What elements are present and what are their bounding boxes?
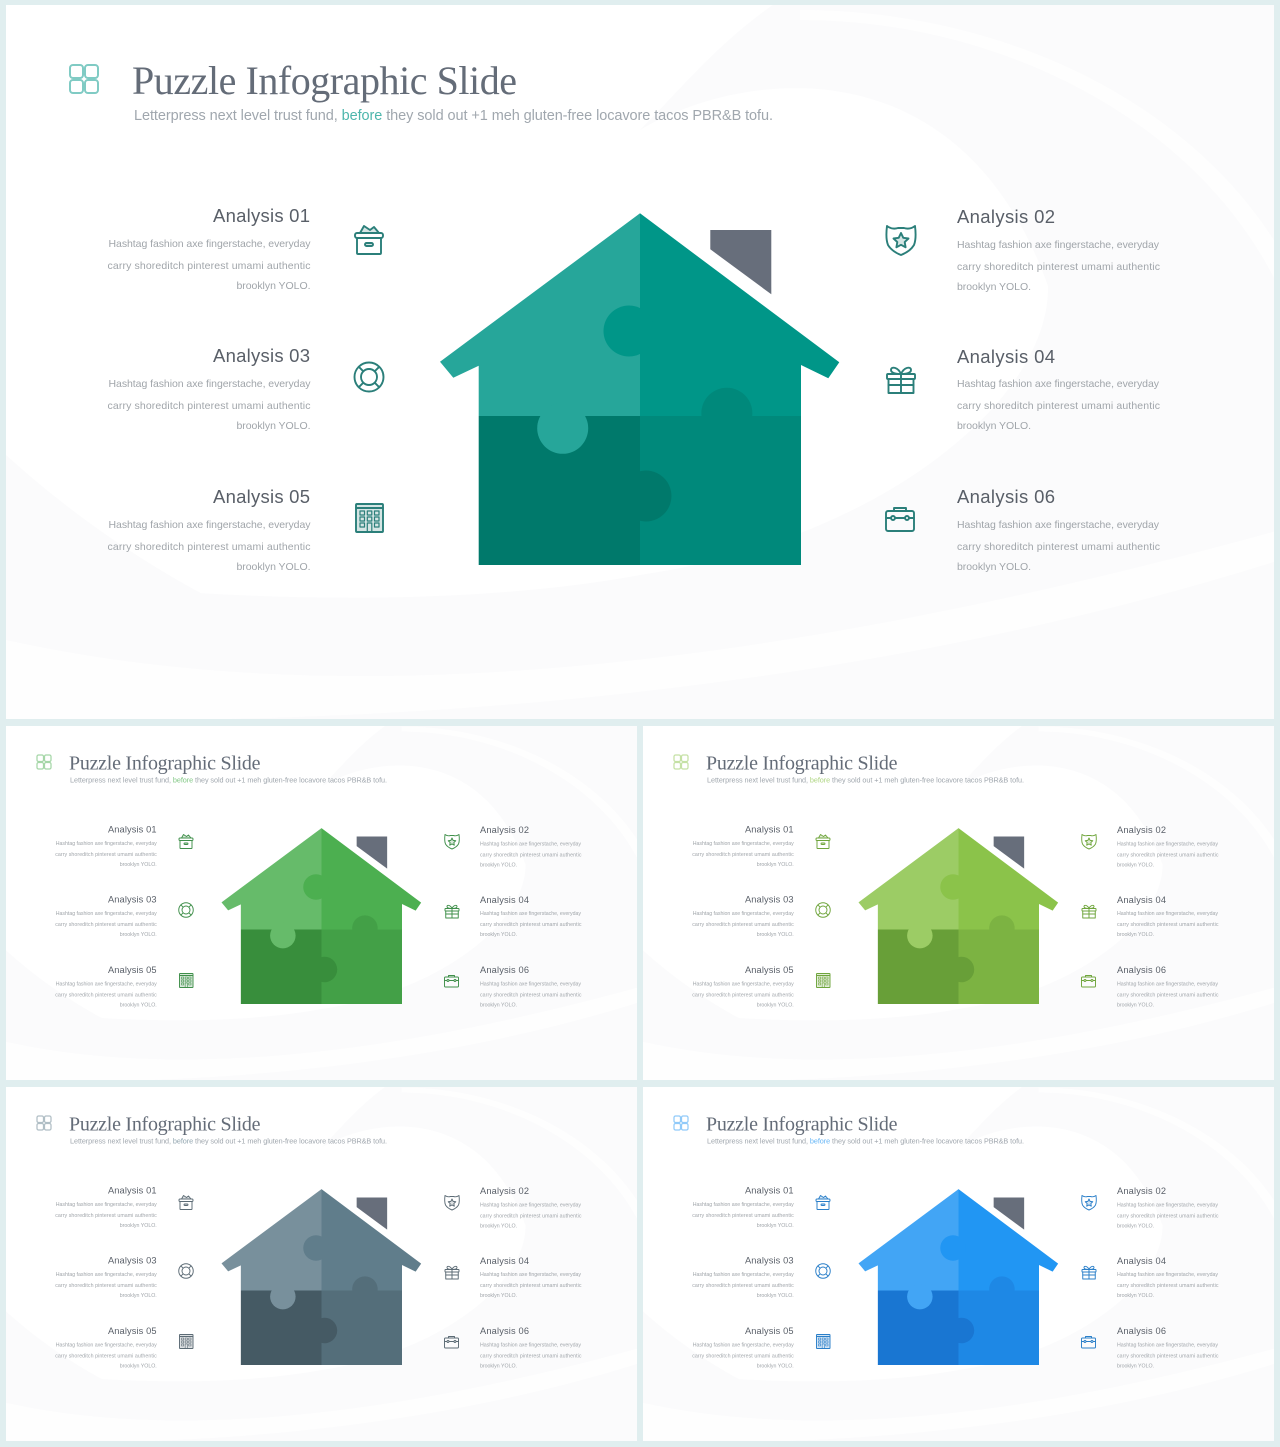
text: Analysis 01: Hashtag fashion axe fingerstache, everyday xyxy=(56,841,157,847)
text: Analysis 06: carry shoreditch pinterest umami authentic xyxy=(480,992,582,998)
text: Analysis 06: Analysis 06 xyxy=(480,965,529,975)
text: Analysis 05: carry shoreditch pinterest umami authentic xyxy=(55,992,157,998)
text: Analysis 04: brooklyn YOLO. xyxy=(957,420,1031,432)
panel: blue slide xyxy=(642,1082,1278,1443)
icon: building xyxy=(180,974,193,988)
text: Analysis 04: carry shoreditch pinterest umami authentic xyxy=(480,922,582,928)
text: Analysis 03 xyxy=(55,1256,157,1299)
text: Analysis 06: Hashtag fashion axe fingerstache, everyday xyxy=(1117,1342,1218,1348)
text: Analysis 03: carry shoreditch pinterest umami authentic xyxy=(108,400,310,412)
icon: briefcase xyxy=(886,508,914,531)
icon: four squares xyxy=(674,755,688,769)
puzzle house: light green xyxy=(858,828,1058,1004)
text: Analysis 06: brooklyn YOLO. xyxy=(1117,1002,1154,1008)
text: Analysis 01: Hashtag fashion axe fingerstache, everyday xyxy=(108,238,311,250)
text: Analysis 03: Analysis 03 xyxy=(745,894,794,904)
text: Analysis 04: brooklyn YOLO. xyxy=(1117,1293,1154,1299)
text: Analysis 05 xyxy=(108,486,311,573)
text: Analysis 03: carry shoreditch pinterest umami authentic xyxy=(55,922,157,928)
puzzle house: blue xyxy=(858,1189,1058,1365)
text: Analysis 02 xyxy=(1117,1186,1219,1230)
icon: gift xyxy=(445,1266,459,1279)
text: Analysis 03 xyxy=(108,345,311,432)
text: Analysis 04 xyxy=(480,1256,582,1299)
text: Analysis 04: Analysis 04 xyxy=(1117,895,1166,905)
icon: shield star xyxy=(1082,834,1096,849)
text: Analysis 04 xyxy=(957,346,1160,432)
icon: building xyxy=(356,504,383,532)
icon: box xyxy=(355,226,383,254)
text: Analysis 01: Hashtag fashion axe fingerstache, everyday xyxy=(693,1202,794,1208)
text: Analysis 05: brooklyn YOLO. xyxy=(757,1364,794,1370)
icon: briefcase xyxy=(444,976,458,987)
text: Analysis 06: Hashtag fashion axe fingerstache, everyday xyxy=(957,519,1160,531)
text: Analysis 02: carry shoreditch pinterest umami authentic xyxy=(1117,1214,1219,1220)
icon: gift xyxy=(445,905,459,918)
text: Analysis 04: brooklyn YOLO. xyxy=(480,1293,517,1299)
text: Analysis 03: brooklyn YOLO. xyxy=(120,1293,157,1299)
icon: building xyxy=(816,974,830,988)
header: blue slide xyxy=(674,1114,1024,1146)
icon: gift xyxy=(1082,1266,1096,1279)
text: Analysis 06: brooklyn YOLO. xyxy=(480,1364,517,1370)
text: Analysis 05: Analysis 05 xyxy=(745,1326,794,1336)
text: Analysis 03 xyxy=(692,1256,794,1299)
text: Analysis 04: carry shoreditch pinterest umami authentic xyxy=(957,400,1160,412)
text: Analysis 06: Hashtag fashion axe fingerstache, everyday xyxy=(480,1342,581,1348)
text: Analysis 05 xyxy=(55,1326,157,1370)
title: Puzzle Infographic Slide xyxy=(69,752,261,774)
text: Analysis 01: Hashtag fashion axe fingerstache, everyday xyxy=(693,841,794,847)
header: blue grey slide xyxy=(37,1114,387,1146)
icon: lifebuoy xyxy=(816,1264,830,1278)
text: Analysis 04: Hashtag fashion axe fingerstache, everyday xyxy=(480,911,581,917)
text: Analysis 06: Analysis 06 xyxy=(957,486,1055,507)
icon: building xyxy=(816,1334,830,1348)
text: Analysis 05: carry shoreditch pinterest umami authentic xyxy=(108,541,310,553)
text: Analysis 05: Analysis 05 xyxy=(745,965,794,975)
panel: light green slide xyxy=(642,722,1278,1082)
title: Puzzle Infographic Slide xyxy=(706,1114,898,1136)
text: Analysis 06: Analysis 06 xyxy=(1117,965,1166,975)
text: Analysis 05: carry shoreditch pinterest umami authentic xyxy=(55,1354,157,1360)
text: Analysis 01: Analysis 01 xyxy=(745,824,794,834)
text: Analysis 03: brooklyn YOLO. xyxy=(757,932,794,938)
text: Analysis 02: carry shoreditch pinterest umami authentic xyxy=(1117,852,1219,858)
text: Analysis 01: Analysis 01 xyxy=(745,1186,794,1196)
text: Analysis 04: brooklyn YOLO. xyxy=(1117,932,1154,938)
icons: teal slide xyxy=(354,226,916,532)
text: Analysis 03: Hashtag fashion axe fingerstache, everyday xyxy=(56,911,157,917)
text: Analysis 05 xyxy=(692,1326,794,1370)
text: Analysis 05: brooklyn YOLO. xyxy=(120,1002,157,1008)
icon: shield star xyxy=(445,834,459,849)
subtitle: Letterpress next level trust fund, before they sold out +1 meh gluten-free locavore tacos PBR&B tofu. xyxy=(707,1136,1024,1146)
text: Analysis 05: Hashtag fashion axe fingerstache, everyday xyxy=(693,1342,794,1348)
text: Analysis 06 xyxy=(957,486,1160,573)
icon: gift xyxy=(887,368,915,393)
icon: lifebuoy xyxy=(179,903,193,917)
text: Analysis 04 xyxy=(1117,1256,1219,1299)
text: Analysis 05: Analysis 05 xyxy=(213,486,310,507)
icon: lifebuoy xyxy=(816,903,830,917)
icon: box xyxy=(816,1196,830,1210)
text: Analysis 02 xyxy=(1117,825,1219,868)
icon: shield star xyxy=(886,226,916,255)
puzzle house: teal xyxy=(440,213,839,565)
text: Analysis 05: Hashtag fashion axe fingerstache, everyday xyxy=(56,982,157,988)
text: Analysis 01: Hashtag fashion axe fingerstache, everyday xyxy=(56,1202,157,1208)
subtitle: Letterpress next level trust fund, before they sold out +1 meh gluten-free locavore tacos PBR&B tofu. xyxy=(134,108,773,124)
text: Analysis 01 xyxy=(108,205,311,292)
text: Analysis 05: Hashtag fashion axe fingerstache, everyday xyxy=(56,1342,157,1348)
text: Analysis 05: carry shoreditch pinterest umami authentic xyxy=(692,992,794,998)
header: green slide xyxy=(37,752,387,784)
icon: shield star xyxy=(445,1196,459,1210)
text: Analysis 03: Hashtag fashion axe fingerstache, everyday xyxy=(693,1272,794,1278)
text: Analysis 03: Analysis 03 xyxy=(213,345,310,366)
panel: blue grey slide xyxy=(4,1082,642,1443)
title: Puzzle Infographic Slide xyxy=(69,1114,261,1136)
icon: box xyxy=(816,834,830,848)
icon: four squares xyxy=(70,65,98,93)
text: Analysis 03: brooklyn YOLO. xyxy=(757,1293,794,1299)
text: Analysis 04: Analysis 04 xyxy=(480,1256,529,1266)
text: Analysis 02: Analysis 02 xyxy=(957,206,1055,227)
text: Analysis 04: Hashtag fashion axe fingerstache, everyday xyxy=(1117,911,1218,917)
icon: four squares xyxy=(674,1116,688,1130)
text: Analysis 05: Hashtag fashion axe fingerstache, everyday xyxy=(108,519,311,531)
text: Analysis 01 xyxy=(55,1186,157,1229)
text: Analysis 04: carry shoreditch pinterest umami authentic xyxy=(1117,922,1219,928)
text: Analysis 02: Hashtag fashion axe fingerstache, everyday xyxy=(480,842,581,848)
text: Analysis 01: Analysis 01 xyxy=(213,205,310,226)
icon: lifebuoy xyxy=(179,1264,193,1278)
text: Analysis 04: Hashtag fashion axe fingerstache, everyday xyxy=(957,378,1160,390)
text: Analysis 05: brooklyn YOLO. xyxy=(236,561,310,573)
text: Analysis 02: brooklyn YOLO. xyxy=(480,1224,517,1230)
icon: four squares xyxy=(37,1116,51,1130)
text: Analysis 03: brooklyn YOLO. xyxy=(236,420,310,432)
title: Puzzle Infographic Slide xyxy=(132,58,517,103)
text: Analysis 06: carry shoreditch pinterest umami authentic xyxy=(480,1354,582,1360)
text: Analysis 03: carry shoreditch pinterest umami authentic xyxy=(55,1283,157,1289)
text: Analysis 02: Analysis 02 xyxy=(1117,1186,1166,1196)
icon: building xyxy=(180,1334,193,1348)
text: Analysis 01: carry shoreditch pinterest umami authentic xyxy=(692,852,794,858)
text: Analysis 01: carry shoreditch pinterest umami authentic xyxy=(692,1213,794,1219)
text: Analysis 01: brooklyn YOLO. xyxy=(120,862,157,868)
text: Analysis 04: Analysis 04 xyxy=(1117,1256,1166,1266)
puzzle house: blue grey xyxy=(222,1189,421,1365)
text: Analysis 04: Hashtag fashion axe fingerstache, everyday xyxy=(1117,1272,1218,1278)
text: Analysis 04 xyxy=(1117,895,1219,938)
text: Analysis 02: Hashtag fashion axe fingerstache, everyday xyxy=(1117,1202,1218,1208)
text: Analysis 01: carry shoreditch pinterest umami authentic xyxy=(108,260,310,272)
text: Analysis 01: brooklyn YOLO. xyxy=(236,280,310,292)
text: Analysis 02 xyxy=(957,206,1160,293)
text: Analysis 06 xyxy=(1117,1326,1219,1370)
text: Analysis 04: carry shoreditch pinterest umami authentic xyxy=(480,1283,582,1289)
text: Analysis 03 xyxy=(55,894,157,938)
icons: blue grey slide xyxy=(179,1196,459,1348)
icon: briefcase xyxy=(1082,1336,1096,1348)
panel: main teal slide xyxy=(6,0,1280,720)
subtitle: Letterpress next level trust fund, before they sold out +1 meh gluten-free locavore tacos PBR&B tofu. xyxy=(70,776,387,784)
panel: green slide xyxy=(4,722,642,1082)
puzzle house: green xyxy=(222,828,421,1004)
text: Analysis 06: carry shoreditch pinterest umami authentic xyxy=(1117,1354,1219,1360)
text: Analysis 02: carry shoreditch pinterest umami authentic xyxy=(480,852,582,858)
text: Analysis 03: carry shoreditch pinterest umami authentic xyxy=(692,1283,794,1289)
text: Analysis 06: brooklyn YOLO. xyxy=(957,561,1031,573)
text: Analysis 06: Analysis 06 xyxy=(1117,1326,1166,1336)
text: Analysis 06: Hashtag fashion axe fingerstache, everyday xyxy=(1117,982,1218,988)
text: Analysis 02: Hashtag fashion axe fingerstache, everyday xyxy=(480,1202,581,1208)
icons: blue slide xyxy=(816,1196,1096,1348)
text: Analysis 06: brooklyn YOLO. xyxy=(480,1002,517,1008)
text: Analysis 03: brooklyn YOLO. xyxy=(120,932,157,938)
text: Analysis 01: Analysis 01 xyxy=(108,824,156,834)
text: Analysis 01: carry shoreditch pinterest umami authentic xyxy=(55,852,157,858)
text: Analysis 06 xyxy=(1117,965,1219,1008)
title: Puzzle Infographic Slide xyxy=(706,752,898,774)
icon: lifebuoy xyxy=(354,362,384,392)
text: Analysis 02: brooklyn YOLO. xyxy=(1117,1224,1154,1230)
text: Analysis 01 xyxy=(55,824,157,868)
icon: shield star xyxy=(1082,1196,1096,1210)
text: Analysis 03: Analysis 03 xyxy=(108,1256,156,1266)
text: Analysis 01: Analysis 01 xyxy=(108,1186,156,1196)
text: Analysis 05 xyxy=(692,965,794,1008)
icons: green slide xyxy=(179,834,459,988)
text: Analysis 05 xyxy=(55,965,157,1008)
text: Analysis 02: Analysis 02 xyxy=(1117,825,1166,835)
text: Analysis 02: Analysis 02 xyxy=(480,1186,529,1196)
text: Analysis 02: brooklyn YOLO. xyxy=(1117,862,1154,868)
text: Analysis 04: Analysis 04 xyxy=(957,346,1055,367)
text: Analysis 06 xyxy=(480,1326,582,1370)
text: Analysis 06 xyxy=(480,965,582,1008)
text: Analysis 02: Hashtag fashion axe fingerstache, everyday xyxy=(957,239,1160,251)
text: Analysis 05: brooklyn YOLO. xyxy=(757,1002,794,1008)
text: Analysis 03: Hashtag fashion axe fingerstache, everyday xyxy=(693,911,794,917)
header: light green slide xyxy=(674,752,1024,784)
text: Analysis 03 xyxy=(692,894,794,938)
text: Analysis 04: Analysis 04 xyxy=(480,895,529,905)
icon: box xyxy=(179,1196,193,1210)
text: Analysis 02: Analysis 02 xyxy=(480,825,529,835)
text: Analysis 02: carry shoreditch pinterest umami authentic xyxy=(480,1214,582,1220)
icon: box xyxy=(179,834,193,848)
text: Analysis 05: Hashtag fashion axe fingerstache, everyday xyxy=(693,982,794,988)
text: Analysis 01 xyxy=(692,824,794,868)
text: Analysis 06: Analysis 06 xyxy=(480,1326,529,1336)
text: Analysis 03: Hashtag fashion axe fingerstache, everyday xyxy=(56,1272,157,1278)
text: Analysis 05: Analysis 05 xyxy=(108,965,156,975)
text: Analysis 04: Hashtag fashion axe fingerstache, everyday xyxy=(480,1272,581,1278)
text: Analysis 04: brooklyn YOLO. xyxy=(480,932,517,938)
text: Analysis 02 xyxy=(480,1186,582,1230)
icon: briefcase xyxy=(1082,976,1096,987)
text: Analysis 01: brooklyn YOLO. xyxy=(757,862,794,868)
text: Analysis 06: Hashtag fashion axe fingerstache, everyday xyxy=(480,982,581,988)
text: Analysis 01 xyxy=(692,1186,794,1229)
text: Analysis 03: carry shoreditch pinterest umami authentic xyxy=(692,922,794,928)
subtitle: Letterpress next level trust fund, before they sold out +1 meh gluten-free locavore tacos PBR&B tofu. xyxy=(707,776,1024,784)
text: Analysis 01: carry shoreditch pinterest umami authentic xyxy=(55,1213,157,1219)
icon: gift xyxy=(1082,905,1096,918)
text: Analysis 01: brooklyn YOLO. xyxy=(120,1223,157,1229)
text: Analysis 02: brooklyn YOLO. xyxy=(480,862,517,868)
subtitle: Letterpress next level trust fund, before they sold out +1 meh gluten-free locavore tacos PBR&B tofu. xyxy=(70,1136,387,1146)
text: Analysis 04: carry shoreditch pinterest umami authentic xyxy=(1117,1283,1219,1289)
text: Analysis 03: Hashtag fashion axe fingerstache, everyday xyxy=(108,378,311,390)
header: teal slide xyxy=(69,64,772,123)
text: Analysis 02: carry shoreditch pinterest umami authentic xyxy=(957,261,1160,273)
text: Analysis 02 xyxy=(480,825,582,868)
icon: four squares xyxy=(37,755,51,769)
text: Analysis 03: Analysis 03 xyxy=(745,1256,794,1266)
text: Analysis 02: Hashtag fashion axe fingerstache, everyday xyxy=(1117,842,1218,848)
text: Analysis 06: carry shoreditch pinterest umami authentic xyxy=(957,541,1160,553)
text: Analysis 05: carry shoreditch pinterest umami authentic xyxy=(692,1354,794,1360)
text: Analysis 04 xyxy=(480,895,582,938)
text: Analysis 02: brooklyn YOLO. xyxy=(957,281,1031,293)
text: Analysis 01: brooklyn YOLO. xyxy=(757,1223,794,1229)
text: Analysis 05: Analysis 05 xyxy=(108,1326,156,1336)
icon: briefcase xyxy=(444,1336,458,1348)
text: Analysis 06: carry shoreditch pinterest umami authentic xyxy=(1117,992,1219,998)
text: Analysis 06: brooklyn YOLO. xyxy=(1117,1364,1154,1370)
icons: light green slide xyxy=(816,834,1096,988)
text: Analysis 03: Analysis 03 xyxy=(108,894,156,904)
text: Analysis 05: brooklyn YOLO. xyxy=(120,1364,157,1370)
